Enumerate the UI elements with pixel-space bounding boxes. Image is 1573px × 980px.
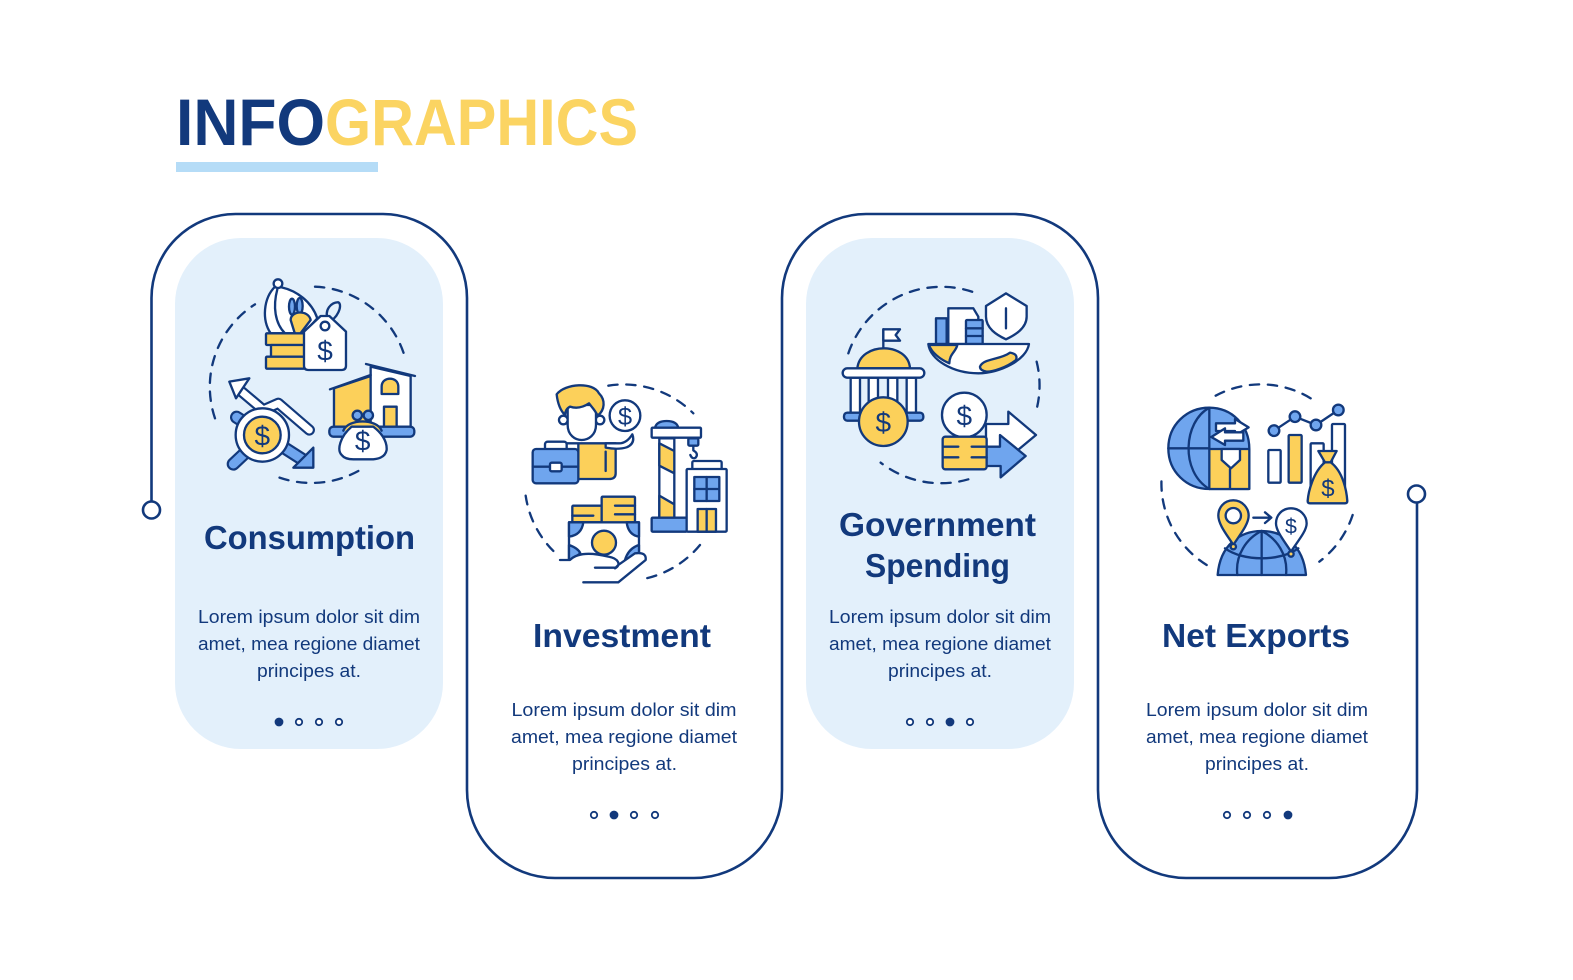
pagination dots: step 1 — [276, 718, 342, 726]
icon: consumption: $ — [355, 426, 371, 457]
text: consumption description — [198, 606, 420, 681]
title — [176, 85, 638, 159]
panel: government spending background — [806, 238, 1074, 749]
connecting wave outline — [152, 214, 1417, 878]
title: INFO — [176, 85, 325, 159]
pagination dots: step 2 — [591, 812, 658, 818]
title: GRAPHICS — [325, 85, 638, 159]
icon: government spending: $ — [876, 407, 892, 438]
icon: consumption: $ — [255, 420, 271, 451]
text: net exports description: Lorem ipsum dolor sit dim — [1146, 699, 1368, 720]
text: net exports description — [1146, 699, 1368, 774]
text: consumption description: amet, mea regione diamet — [198, 633, 420, 654]
icon: net exports — [1161, 384, 1353, 575]
heading: government spending: Spending — [865, 547, 1010, 584]
title underline — [176, 162, 378, 172]
text: net exports description: principes at. — [1205, 753, 1309, 774]
heading: investment: Investment — [533, 617, 711, 654]
icon: consumption: $ — [317, 336, 333, 367]
icon: consumption — [210, 279, 415, 483]
text: investment description: principes at. — [572, 753, 677, 774]
text: government spending description: Lorem ipsum dolor sit dim — [829, 606, 1051, 627]
icon: investment — [526, 384, 727, 582]
heading: consumption: Consumption — [204, 519, 415, 556]
icon: government spending — [843, 287, 1040, 483]
icon: net exports: $ — [1321, 475, 1335, 502]
end marker — [1408, 486, 1425, 502]
text: net exports description: amet, mea regione diamet — [1146, 726, 1368, 747]
panel: consumption background — [175, 238, 443, 749]
text: consumption description: principes at. — [257, 660, 361, 681]
text: investment description — [511, 699, 737, 774]
text: government spending description: amet, mea regione diamet — [829, 633, 1051, 654]
icon: investment: $ — [618, 403, 632, 431]
text: investment description: Lorem ipsum dolor sit dim — [512, 699, 736, 720]
text: government spending description — [829, 606, 1051, 681]
pagination dots: step 3 — [907, 718, 973, 726]
heading: government spending: Government — [839, 506, 1036, 543]
heading: net exports: Net Exports — [1162, 617, 1350, 654]
text: consumption description: Lorem ipsum dolor sit dim — [198, 606, 420, 627]
start marker — [143, 502, 160, 518]
text: government spending description: principes at. — [888, 660, 992, 681]
pagination dots: step 4 — [1224, 812, 1292, 818]
text: investment description: amet, mea regione diamet — [511, 726, 737, 747]
icon: government spending: $ — [957, 400, 973, 431]
heading: government spending — [839, 506, 1036, 584]
icon: net exports: $ — [1285, 515, 1297, 539]
